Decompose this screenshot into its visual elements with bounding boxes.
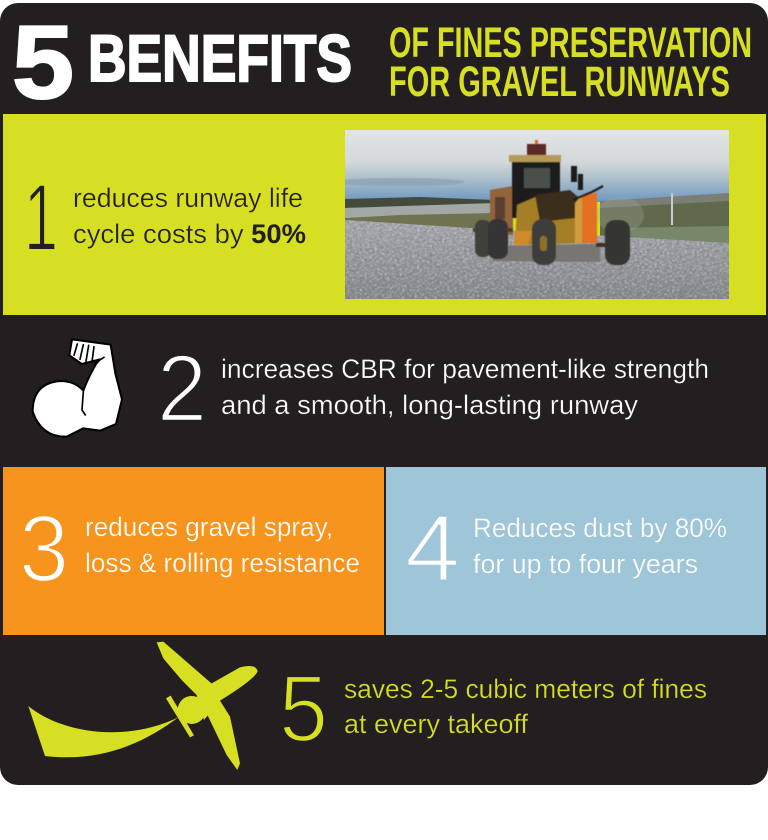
panel: benefit 1 — [3, 114, 766, 315]
photo: motor grader on gravel runway — [335, 130, 729, 299]
title: benefits: BENEFITS — [88, 21, 352, 95]
title — [12, 5, 752, 121]
benefit 1 text: cycle costs by 50% — [73, 219, 306, 249]
number 3: 3 — [19, 496, 69, 602]
panel: benefit 3 — [3, 467, 384, 635]
panel: benefit 5 — [28, 642, 707, 770]
number 5: 5 — [279, 656, 328, 762]
benefit 3 text: reduces gravel spray, — [85, 512, 333, 542]
benefit 3 text — [85, 512, 360, 578]
number 2: 2 — [157, 336, 207, 442]
title: big 5: 5 — [12, 5, 74, 121]
benefit 5 text: saves 2-5 cubic meters of fines — [344, 674, 707, 704]
benefit 1 text — [73, 183, 306, 249]
icon: flexed bicep — [33, 339, 122, 437]
benefit 2 text: increases CBR for pavement-like strength — [221, 354, 709, 384]
benefit 4 text: for up to four years — [473, 549, 698, 579]
number 4: 4 — [405, 496, 460, 602]
benefit 5 text: at every takeoff — [344, 709, 528, 739]
icon: airplane taking off with trail — [28, 642, 258, 770]
panel: benefit 4 — [386, 467, 766, 635]
benefit 4 text — [473, 513, 727, 579]
benefit 1 text: reduces runway life — [73, 183, 303, 213]
benefit 5 text — [344, 674, 707, 739]
benefit 4 text: Reduces dust by 80% — [473, 513, 727, 543]
benefit 3 text: loss & rolling resistance — [85, 548, 360, 578]
benefit 2 text — [221, 354, 709, 420]
grader — [473, 140, 630, 265]
panel: benefit 2 — [33, 336, 709, 442]
number 1: 1 — [24, 165, 58, 271]
benefit 2 text: and a smooth, long-lasting runway — [221, 390, 638, 420]
